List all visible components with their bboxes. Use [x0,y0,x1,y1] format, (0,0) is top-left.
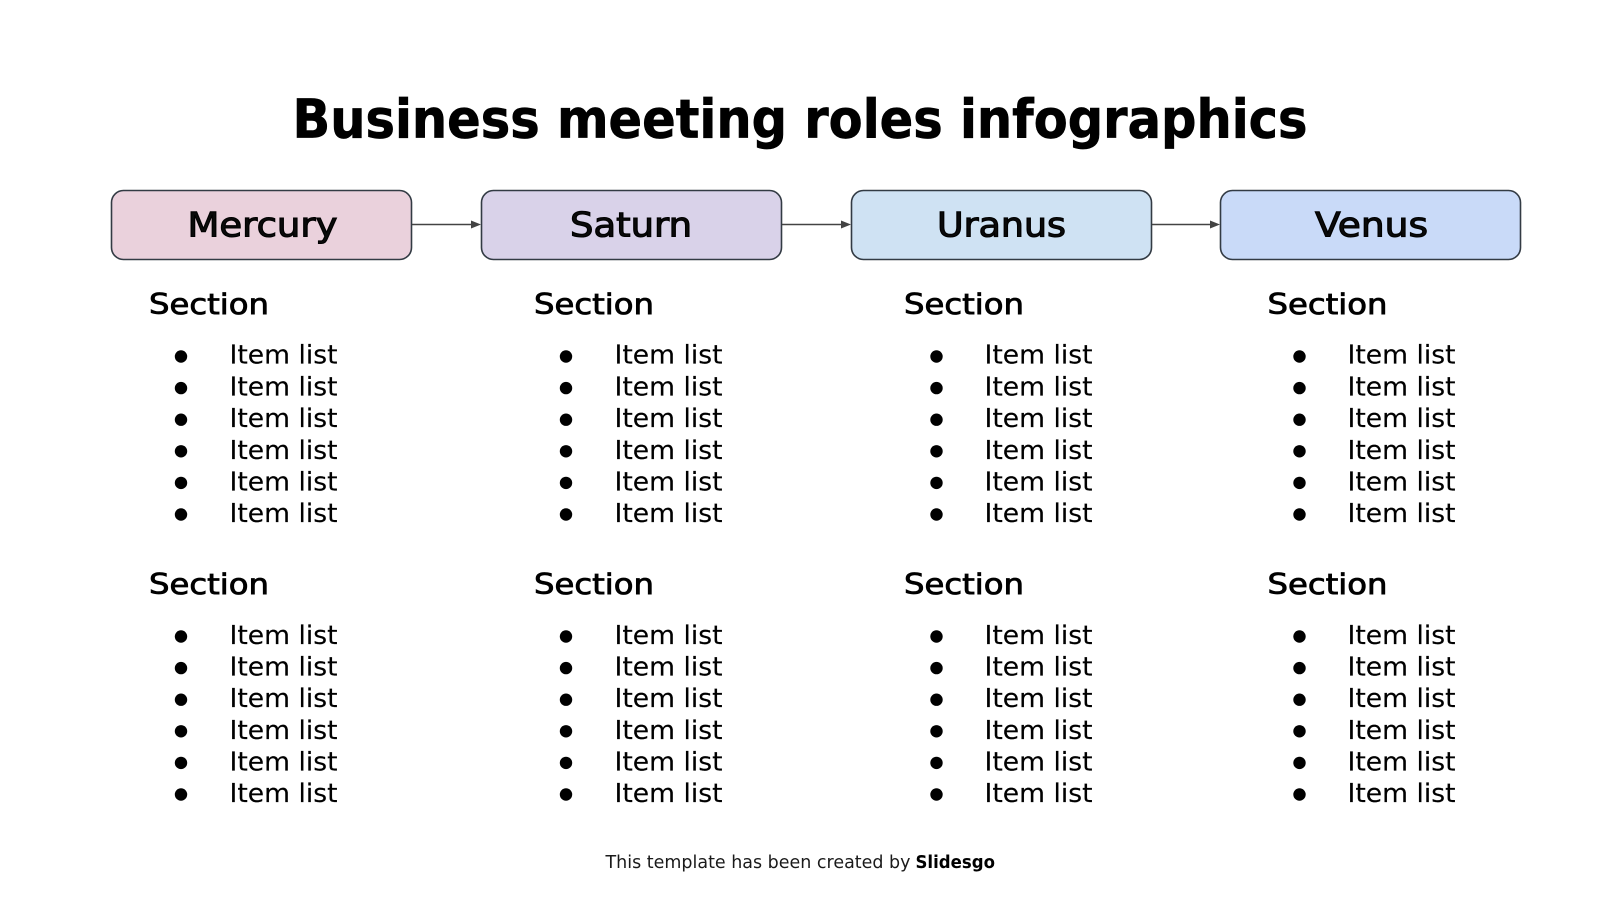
column: Mercury [149,288,338,809]
section block 1: Item list [984,340,1092,370]
section block 2: Item list [614,716,722,746]
section block 2: Item list [984,653,1092,683]
section block 1: Item list [1348,340,1456,370]
section block 2: Item list [1348,621,1456,651]
section block 2 [904,568,1092,809]
section block 2: Section [904,568,1024,601]
footer credit: This template has been created by [605,852,911,873]
section block 2: Section [534,568,654,601]
section block 2 [149,568,338,809]
section block 1: Section [1268,288,1388,321]
section block 2: Item list [1348,684,1456,714]
header: Uranus: Uranus [937,206,1066,244]
section block 2 [534,568,722,809]
section block 2: Item list [1348,653,1456,683]
header: Saturn: Saturn [570,206,692,244]
section block 2: Item list [984,716,1092,746]
header: Mercury: Mercury [188,206,338,244]
section block 1: Item list [230,436,338,466]
section block 1: Item list [1348,436,1456,466]
column: Venus [1268,288,1456,809]
section block 1: Item list [230,404,338,434]
section block 2: Section [149,568,269,601]
section block 2: Item list [230,779,338,809]
section block 1: Item list [1348,373,1456,403]
section block 2: Item list [230,621,338,651]
section block 1: Item list [614,436,722,466]
section block 2: Item list [614,621,722,651]
section block 1: Item list [614,467,722,497]
section block 1: Section [149,288,269,321]
section block 2: Item list [984,779,1092,809]
section block 2: Item list [984,747,1092,777]
section block 1: Item list [614,373,722,403]
section block 1 [1268,288,1456,529]
section block 1: Item list [230,373,338,403]
section block 2 [1268,568,1456,809]
arrow: Mercury to Saturn [412,220,481,228]
section block 2: Item list [614,747,722,777]
arrow: Uranus to Venus [1152,220,1220,228]
section block 1: Section [534,288,654,321]
arrow: Saturn to Uranus [782,220,851,228]
header: Venus: Venus [1315,206,1428,244]
section block 1: Item list [230,467,338,497]
section block 1: Item list [230,340,338,370]
section block 1: Item list [230,499,338,529]
section block 2: Item list [1348,779,1456,809]
section block 1: Item list [614,404,722,434]
header: Uranus [852,190,1152,260]
section block 1: Item list [1348,499,1456,529]
section block 2: Item list [230,653,338,683]
section block 2: Item list [614,684,722,714]
section block 1 [904,288,1092,529]
header: Venus [1220,190,1520,260]
section block 2: Item list [614,653,722,683]
header: Mercury [112,190,412,260]
column: Saturn [534,288,722,809]
header: Saturn [482,190,782,260]
section block 2: Item list [614,779,722,809]
footer credit: Slidesgo [916,852,995,873]
section block 1: Item list [614,499,722,529]
section block 2: Section [1268,568,1388,601]
section block 1: Item list [984,436,1092,466]
section block 2: Item list [1348,716,1456,746]
section block 1: Section [904,288,1024,321]
section block 2: Item list [984,684,1092,714]
section block 1: Item list [984,404,1092,434]
section block 2: Item list [230,684,338,714]
section block 1: Item list [614,340,722,370]
section block 1: Item list [984,499,1092,529]
section block 2: Item list [1348,747,1456,777]
section block 2: Item list [230,747,338,777]
section block 2: Item list [230,716,338,746]
column: Uranus [904,288,1092,809]
section block 1 [149,288,338,529]
section block 1: Item list [1348,404,1456,434]
section block 1: Item list [1348,467,1456,497]
section block 1: Item list [984,467,1092,497]
section block 1 [534,288,722,529]
section block 2: Item list [984,621,1092,651]
title: Business meeting roles infographics [292,88,1308,150]
section block 1: Item list [984,373,1092,403]
